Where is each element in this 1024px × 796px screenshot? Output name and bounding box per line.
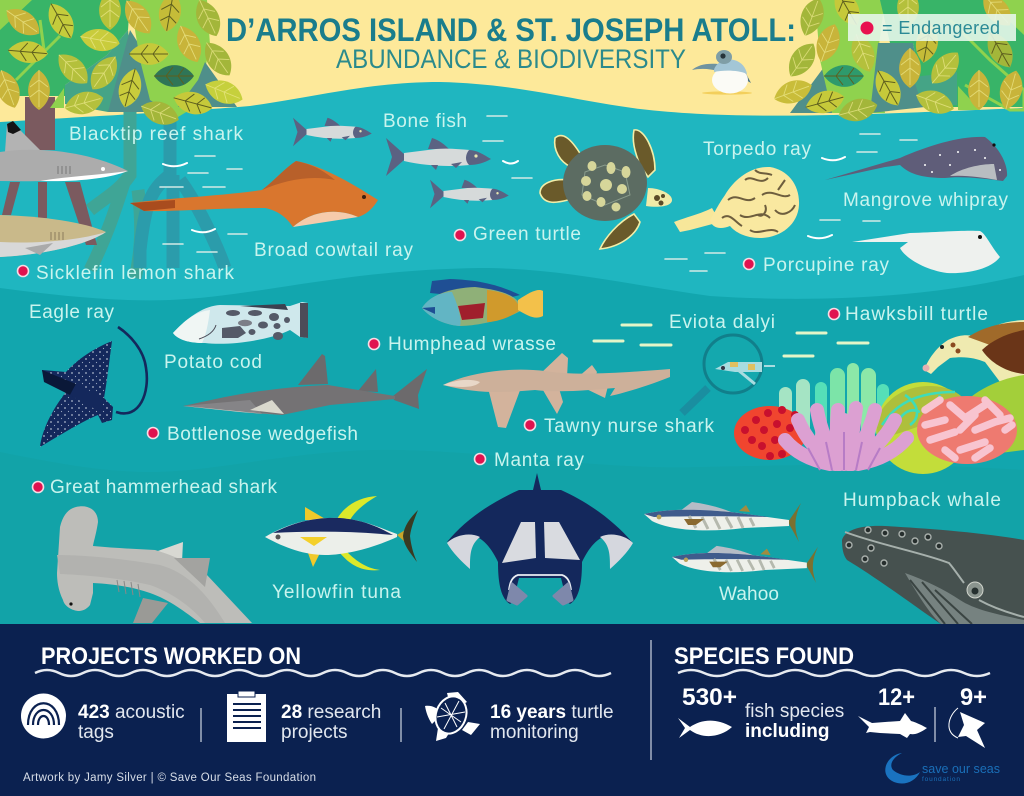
stat: fish species including: including — [745, 721, 829, 742]
stat: 530+: 530+ — [682, 684, 737, 711]
shoal near eviota — [594, 325, 868, 356]
bone fish group — [293, 118, 509, 208]
title line 1: D’ARROS ISLAND & ST. JOSEPH ATOLL: — [226, 12, 796, 48]
icon: hatchling turtle on sand — [692, 50, 752, 95]
label: Broad cowtail ray: Broad cowtail ray — [254, 240, 414, 261]
label: Manta ray: Manta ray — [494, 450, 584, 471]
label: Humpback whale: Humpback whale — [843, 490, 1001, 511]
torpedo ray — [674, 167, 799, 238]
stat: acoustic tags: 423 acoustic — [78, 702, 185, 723]
manta ray — [447, 473, 633, 608]
footer panel — [0, 624, 1024, 796]
potato cod — [173, 302, 308, 344]
stat: 9+: 9+ — [960, 684, 987, 711]
porcupine ray — [852, 231, 1000, 273]
background: middle water band — [0, 268, 1024, 500]
label: Eviota dalyi: Eviota dalyi — [669, 312, 775, 333]
small fish shoals — [160, 116, 917, 271]
great hammerhead shark — [57, 506, 252, 623]
wave divider: species — [678, 670, 990, 676]
bottlenose wedgefish — [183, 354, 427, 415]
background: sand sky — [0, 0, 1024, 130]
label: Eagle ray: Eagle ray — [29, 302, 114, 323]
label: Green turtle: Green turtle — [473, 224, 581, 245]
stat: research projects: 28 research — [281, 702, 381, 723]
background: lower water band — [0, 450, 1024, 630]
stat: research projects: projects — [281, 722, 348, 743]
label: Great hammerhead shark: Great hammerhead shark — [50, 477, 278, 498]
mangrove tree: right — [770, 0, 1024, 126]
label: Mangrove whipray: Mangrove whipray — [843, 190, 1008, 211]
icon: acoustic tag — [21, 694, 66, 738]
label: Torpedo ray: Torpedo ray — [703, 139, 812, 160]
label: Bone fish: Bone fish — [383, 111, 467, 132]
mangrove tree: left — [0, 0, 247, 245]
yellowfin tuna — [265, 496, 418, 570]
label: Hawksbill turtle: Hawksbill turtle — [845, 304, 988, 325]
green turtle — [540, 130, 672, 249]
legend: endangered: = Endangered — [882, 18, 1000, 38]
broad cowtail ray — [130, 161, 378, 227]
wave divider: projects — [35, 670, 611, 676]
heading: projects worked on: PROJECTS WORKED ON — [41, 643, 301, 670]
stat: 12+: 12+ — [878, 684, 915, 711]
stat: turtle monitoring: monitoring — [490, 722, 579, 743]
legend: endangered — [848, 14, 1016, 41]
humphead wrasse — [422, 279, 543, 326]
mangrove whipray — [825, 137, 1007, 181]
wahoo fish — [644, 502, 818, 583]
heading: species found: SPECIES FOUND — [674, 643, 854, 670]
label: Blacktip reef shark: Blacktip reef shark — [69, 124, 244, 145]
logo: save our seas — [885, 753, 1000, 784]
icon: clipboard — [227, 691, 266, 742]
label: Yellowfin tuna: Yellowfin tuna — [272, 582, 401, 603]
stat: acoustic tags: tags — [78, 722, 114, 743]
vertical divider — [650, 640, 652, 760]
blacktip reef shark — [0, 121, 128, 181]
icon: ray silhouette — [949, 708, 985, 748]
eagle ray — [40, 327, 147, 447]
background: upper water band — [0, 82, 1024, 320]
stat: fish species including: fish species — [745, 701, 844, 722]
label: Potato cod: Potato cod — [164, 352, 262, 373]
title line 2: ABUNDANCE & BIODIVERSITY — [336, 44, 686, 74]
stat: turtle monitoring: 16 years turtle — [490, 702, 614, 723]
eviota dalyi magnifier — [682, 335, 775, 413]
icon: tuna silhouette — [678, 718, 732, 738]
mangrove roots, translucent — [90, 112, 225, 278]
label: Tawny nurse shark: Tawny nurse shark — [544, 416, 714, 437]
coral reef — [734, 363, 1024, 474]
label: Bottlenose wedgefish: Bottlenose wedgefish — [167, 424, 358, 445]
humpback whale — [842, 526, 1024, 624]
title — [226, 12, 796, 74]
label: Humphead wrasse: Humphead wrasse — [388, 334, 556, 355]
label: Sicklefin lemon shark: Sicklefin lemon shark — [36, 263, 234, 284]
tawny nurse shark — [443, 353, 670, 428]
logo: save our seas: save our seas — [922, 762, 1000, 776]
icon: turtle — [425, 692, 480, 741]
species labels — [18, 111, 1008, 605]
hawksbill turtle — [922, 320, 1024, 385]
logo: save our seas: foundation — [922, 776, 960, 783]
label: Wahoo: Wahoo — [719, 584, 779, 605]
icon: shark silhouette — [858, 713, 927, 738]
credit line: Artwork by Jamy Silver | © Save Our Seas Foundation — [23, 772, 316, 784]
label: Porcupine ray: Porcupine ray — [763, 255, 890, 276]
sicklefin lemon shark — [0, 215, 106, 257]
